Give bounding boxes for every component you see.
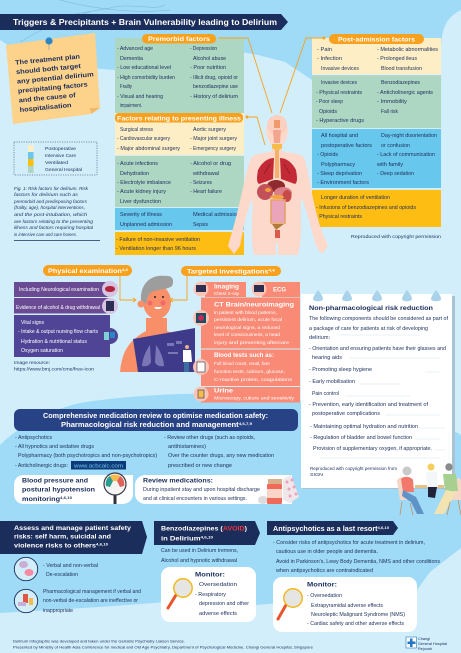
panel: investigations — [193, 282, 300, 402]
footer credits: Presented by Ministry of Health Asia Conference for medical and Old Age Psychiatry, Department of Psychological Medicine, Changi General Hospital, Singapore — [13, 646, 313, 650]
panel: monitor benzodiazepines: adverse effects — [199, 611, 237, 617]
panel: non-pharmacological risk reduction: Pain control — [312, 391, 339, 397]
panel: non-pharmacological risk reduction: Non-pharmacological risk reduction — [309, 305, 433, 312]
heading: factors relating to presenting illness — [115, 113, 243, 122]
panel: post-admission factors: Polypharmacy — [321, 162, 355, 168]
text: benzodiazepine use: Alcohol and hypnotic withdrawal — [161, 558, 237, 564]
sticky note callout: The treatment plan — [15, 54, 80, 67]
panel: predisposing and presenting factors: - History of delirium — [190, 94, 239, 100]
panel: investigations: injury and preventing aftercare — [214, 340, 289, 346]
callout: blood pressure monitoring: Blood pressure and — [22, 478, 88, 484]
figure caption: factors for delirium such as — [14, 192, 79, 197]
panel: predisposing and presenting factors: - Major joint surgery — [190, 136, 237, 142]
connector lines — [218, 37, 325, 145]
panel: physical examination items: Oxygen saturation — [21, 348, 63, 354]
heading: antipsychotics — [267, 521, 398, 535]
medication review list: Polypharmacy (both psychotropics and non-psychotropics) — [18, 453, 157, 459]
heading: physical examination — [43, 265, 132, 276]
panel: monitor antipsychotics: Neuroleptic Malignant Syndrome (NMS) — [311, 612, 405, 618]
panel: predisposing and presenting factors: Surgical stress — [120, 127, 153, 133]
panel: predisposing and presenting factors: - Alcohol or drug — [190, 161, 231, 167]
panel: non-pharmacological risk reduction: - Prevention, early identification and treatment of — [309, 402, 429, 408]
heading: benzodiazepines: in Delirium — [161, 536, 196, 542]
figure caption — [13, 186, 94, 237]
panel: investigations: C-reactive protein, coagulations — [214, 377, 293, 383]
heading: premorbid factors — [142, 34, 216, 44]
panel: non-pharmacological risk reduction: - Maintaining optimal hydration and nutrition — [310, 424, 418, 430]
panel: investigations: Imaging — [214, 284, 239, 290]
panel: physical examination items: Hydration & nutritional status — [21, 339, 87, 345]
sticky note callout: precipitating factors — [18, 81, 88, 95]
panel: post-admission factors: - Physical restraints — [316, 214, 362, 220]
callout: review medications: During inpatient stay and upon hospital discharge — [143, 487, 260, 493]
heading: benzodiazepines — [154, 521, 260, 545]
text: pharmacological management: inappropriate — [43, 608, 73, 614]
callout: review medications — [135, 475, 292, 504]
panel: investigations: level of consciousness, a head — [214, 332, 280, 338]
heading: medication review: Comprehensive medication review to optimise medication safety: — [43, 413, 268, 420]
panel: non-pharmacological risk reduction: - Promoting sleep hygiene — [309, 367, 372, 373]
panel: predisposing and presenting factors: Severity of illness — [120, 212, 162, 218]
panel: physical examination items: Including Neurological examination — [19, 287, 99, 293]
logo: hospital: Changi — [418, 637, 430, 641]
image source note: Image resource: — [14, 360, 50, 365]
heading: assess and manage safety: 4,6,10 — [96, 542, 109, 546]
sticky note callout: any potential delirium — [17, 71, 94, 86]
panel: post-admission factors: - Sleep deprivation — [317, 171, 362, 177]
panel: physical examination items: Vital signs — [21, 320, 44, 326]
text: pharmacological management — [43, 589, 141, 614]
text: de-escalation: - Verbal and non-verbal — [43, 563, 98, 569]
panel: predisposing and presenting factors: Sepsis — [193, 222, 208, 228]
legend: Intensive Care — [45, 153, 77, 158]
footer credits: Delirium Infographic was developed and taken under the Geriatric Psychiatry Liaison Service. — [13, 640, 185, 644]
text: de-escalation — [43, 563, 98, 578]
panel: predisposing and presenting factors: - Acute infections — [117, 161, 158, 167]
callout: blood pressure monitoring: postural hypotension — [22, 486, 95, 494]
text: antipsychotic cautions: - Consider risks of antipsychotics for acute treatment in delirium, — [273, 540, 425, 546]
footer credits — [13, 640, 313, 650]
heading: medication review: Pharmacological risk reduction and management — [61, 422, 225, 429]
panel: predisposing and presenting factors: withdrawal — [192, 171, 219, 177]
panel: monitor antipsychotics: Monitor: — [307, 582, 337, 588]
panel: monitor benzodiazepines: Monitor: — [195, 572, 225, 578]
heading: benzodiazepines: 4,6,10 — [200, 534, 214, 540]
heading: assess and manage safety — [0, 521, 147, 554]
panel: investigations: Blood tests such as: — [214, 352, 274, 359]
panel: post-admission factors: with family — [376, 162, 403, 168]
heading: antipsychotics: Antipsychotics as a last resort — [273, 526, 375, 533]
panel: non-pharmacological risk reduction: SIGN — [310, 472, 323, 477]
text: de-escalation: De-escalation — [46, 572, 78, 578]
figure caption: illness and factors requiring hospital — [14, 225, 94, 230]
heading: medication review: 4,6,7,9 — [239, 421, 253, 426]
figure caption: (frailty, age), hospital interventions, — [14, 205, 85, 210]
panel: predisposing and presenting factors: - Visual and hearing — [117, 94, 163, 100]
panel: non-pharmacological risk reduction: - Early mobilisation — [309, 379, 355, 385]
panel: predisposing and presenting factors: - Heart failure — [190, 189, 222, 195]
medication review list: - Review other drugs (such as opioids, — [164, 435, 255, 441]
heading: benzodiazepines: Benzodiazepines ( AVOID) — [161, 526, 247, 532]
panel: post-admission factors: Longer duration of ventilation — [321, 195, 390, 201]
text: antipsychotic cautions: cautious use in older people and dementia. — [276, 549, 378, 555]
panel: predisposing and presenting factors: - Failure of non-invasive ventilation — [116, 237, 200, 243]
panel: investigations: function tests, calcium, glucose, — [214, 369, 285, 375]
sticky note callout: hospitalisation — [19, 102, 72, 114]
panel: non-pharmacological risk reduction: The following components should be considered as part of — [309, 316, 449, 322]
panel: predisposing and presenting factors: - Low educational level — [117, 65, 171, 71]
text: antipsychotic cautions — [273, 540, 440, 574]
panel: post-admission factors: - Anticholinergic agents — [377, 90, 433, 96]
panel: non-pharmacological risk reduction: - Orientation and ensuring patients have their glasses and — [309, 346, 446, 352]
panel: non-pharmacological risk reduction: delirium: — [309, 335, 330, 341]
panel: physical examination items — [14, 281, 118, 357]
panel: monitor antipsychotics: - Oversedation — [307, 593, 342, 599]
sticky note callout: should both target — [16, 63, 82, 76]
illustration: patients with clinician — [397, 463, 461, 515]
icon: conversation — [14, 557, 38, 581]
panel: non-pharmacological risk reduction: - Regulation of bladder and bowel function — [310, 435, 412, 441]
panel: post-admission factors: - Lack of communication — [377, 152, 435, 158]
heading: post-admission factors: Post-admission factors — [338, 36, 415, 44]
panel: post-admission factors: Fall risk — [381, 109, 398, 115]
text: benzodiazepine use: Can be used in Delirium tremens, — [161, 548, 238, 554]
panel: post-admission factors: - Deep sedation — [377, 171, 414, 177]
panel: post-admission factors: - Physical restraints — [316, 90, 362, 96]
logo: hospital: Rejuvah — [418, 647, 432, 651]
panel: monitor benzodiazepines: Oversedation — [199, 582, 237, 588]
panel: non-pharmacological risk reduction — [301, 290, 455, 489]
arrows to patient — [120, 276, 187, 302]
heading: targeted investigations — [181, 266, 281, 276]
panel: predisposing and presenting factors: Alcohol abuse — [193, 56, 226, 62]
panel: monitor antipsychotics: - Cardiac safety and other adverse effects — [307, 621, 404, 627]
panel: post-admission factors: - Hyperactive drugs — [316, 118, 364, 124]
figure caption: and the post-intubation, which — [14, 212, 88, 217]
panel: monitor benzodiazepines — [161, 567, 256, 622]
sticky note callout — [6, 33, 100, 124]
figure caption: in intensive care and care homes. — [14, 232, 77, 237]
medication review list: Over the counter drugs, any new medication — [168, 453, 274, 459]
heading: post-admission factors — [329, 34, 424, 44]
panel: monitor benzodiazepines: - Respiratory — [195, 592, 226, 598]
panel: post-admission factors: Invasive devices — [321, 66, 359, 72]
panel: predisposing and presenting factors — [115, 38, 244, 255]
panel: investigations: Urine — [214, 388, 234, 394]
logo: hospital: General Hospital — [418, 642, 447, 646]
medication review list: - All hypnotics and sedative drugs — [15, 444, 94, 450]
legend — [14, 142, 97, 175]
arrow line — [14, 240, 100, 242]
panel: predisposing and presenting factors: - Poor nutrition — [190, 65, 226, 71]
medication review list — [15, 435, 274, 469]
heading: medication review — [14, 409, 298, 431]
text: antipsychotic cautions: Avoid in Parkinson's, Lewy Body Dementia, NMS and other conditions — [276, 559, 440, 565]
illustration: human body with organs — [228, 115, 328, 255]
panel: predisposing and presenting factors: - Electrolyte imbalance — [117, 180, 171, 186]
figure caption: are factors relating to the presenting — [14, 219, 94, 224]
panel: investigations: neurological signs, a reduced — [214, 325, 280, 331]
panel: predisposing and presenting factors: - Cardiovascular surgery — [117, 136, 170, 142]
panel: predisposing and presenting factors: Frailty — [120, 84, 132, 90]
illustration: patient with chest x-ray — [120, 276, 195, 372]
panel: predisposing and presenting factors: Dementia — [120, 56, 143, 62]
panel: investigations: ECG — [273, 286, 286, 294]
panel: predisposing and presenting factors: - Seizures — [190, 180, 212, 186]
callout: blood pressure monitoring: monitoring — [22, 496, 58, 503]
legend: Postoperative — [45, 146, 77, 151]
panel: non-pharmacological risk reduction: a package of care for patients at risk of developing — [309, 326, 428, 332]
panel: predisposing and presenting factors: - Major abdominal surgery — [117, 146, 180, 152]
panel: post-admission factors: Blood transfusion — [381, 66, 422, 72]
heading: factors relating to presenting illness: Factors relating to presenting illness — [117, 115, 241, 122]
panel: investigations: Microscopy, culture and sensitivity — [214, 396, 295, 402]
medication review list: - Antipsychotics — [15, 435, 52, 441]
panel: non-pharmacological risk reduction: hearing aids — [312, 355, 342, 361]
panel: post-admission factors: - Prolonged ileus — [377, 56, 417, 62]
panel: physical examination items: Evidence of alcohol & drug withdrawal — [16, 305, 100, 311]
panel: predisposing and presenting factors: - Advanced age — [117, 46, 153, 52]
panel: post-admission factors: - Infusions of benzodiazepines and opioids — [316, 205, 416, 211]
legend: General Hospital — [45, 167, 82, 172]
panel: post-admission factors: postoperative factors — [321, 143, 372, 149]
heading: assess and manage safety: Assess and manage patient safety — [14, 525, 131, 532]
medication review list: - Anticholinergic drugs: — [15, 463, 68, 469]
panel: predisposing and presenting factors: benzodiazepine use — [193, 84, 238, 90]
panel: non-pharmacological risk reduction: Reproduced with copyright permission from — [310, 466, 397, 471]
panel: predisposing and presenting factors: - Acute kidney injury — [117, 189, 166, 195]
panel: physical examination items: - Intake & output nursing flow charts — [18, 329, 98, 335]
panel: investigations: CT Brain/neuroimaging — [214, 302, 294, 308]
callout: blood pressure monitoring — [14, 473, 133, 504]
text: pharmacological management: Pharmacological management if verbal and — [43, 589, 141, 595]
panel: predisposing and presenting factors: impairment. — [120, 103, 142, 109]
panel: post-admission factors: - Opioids — [317, 152, 338, 158]
heading: assess and manage safety: violence risks to others — [14, 542, 90, 550]
panel: investigations: persistent delirium, acute focal — [214, 317, 282, 323]
panel: non-pharmacological risk reduction: Provision of supplementary oxygen, if appropriate. — [313, 446, 432, 452]
link: anticholinergic calculator: www.acbcalc.com — [74, 463, 123, 469]
icon: medicines — [258, 475, 299, 504]
panel: post-admission factors: Benzodiazepines — [381, 80, 420, 86]
panel: monitor benzodiazepines: depression and other — [199, 601, 249, 607]
panel: investigations: Full blood count, renal, liver — [214, 361, 270, 367]
legend: Ventilated — [45, 160, 69, 165]
panel: monitor antipsychotics — [273, 577, 417, 632]
panel: investigations: Chest X-ray — [214, 291, 240, 296]
panel: post-admission factors: - Environment factors — [317, 180, 369, 186]
panel: predisposing and presenting factors: - Depression — [190, 46, 217, 52]
link: anticholinergic calculator — [71, 461, 126, 470]
panel: investigations: in patient with blood patterns, — [214, 310, 277, 316]
logo: hospital — [406, 637, 447, 651]
callout: blood pressure monitoring: 4,6,10 — [60, 495, 73, 500]
callout: review medications: Review medications: — [143, 478, 213, 484]
figure caption: premorbid and predisposing factors — [13, 199, 88, 204]
panel: post-admission factors: All hospital and — [321, 133, 358, 139]
heading: targeted investigations: 4,6 — [268, 268, 276, 272]
panel: monitor antipsychotics: Extrapyramidal adverse effects — [311, 603, 383, 609]
panel: predisposing and presenting factors: Aortic surgery — [193, 127, 226, 133]
panel: predisposing and presenting factors: Unplanned admission — [120, 222, 172, 228]
panel: post-admission factors — [312, 38, 441, 227]
panel: non-pharmacological risk reduction: postoperative complications — [312, 411, 380, 417]
medication review list: antihistamines) — [168, 444, 206, 450]
heading: assess and manage safety: risks: self harm, suicidal and — [14, 534, 111, 540]
image source note — [14, 360, 95, 372]
panel: predisposing and presenting factors: - High comorbidity burden — [117, 75, 175, 81]
panel: predisposing and presenting factors: - Emergency surgery — [190, 146, 236, 152]
copyright note: Reproduced with copyright permission — [351, 234, 442, 239]
heading: physical examination: 4,6 — [122, 267, 129, 272]
panel: post-admission factors: Invasive devices — [321, 80, 357, 86]
panel: predisposing and presenting factors: Liver dysfunction — [120, 199, 161, 205]
panel: predisposing and presenting factors: Medical admission — [193, 212, 240, 218]
title banner — [0, 14, 288, 30]
text: pharmacological management: non-verbal de-escalation are ineffective or — [43, 598, 138, 604]
title banner: Triggers & Precipitants + Brain Vulnerability leading to Delirium — [13, 18, 277, 27]
panel: post-admission factors: - Poor sleep — [316, 99, 343, 105]
medication review list: prescribed or new change — [168, 463, 232, 469]
panel: post-admission factors: Day-night disorientation — [381, 133, 437, 139]
panel: post-admission factors: Opioids — [319, 109, 337, 115]
panel: post-admission factors: - Infection — [317, 56, 342, 62]
panel: post-admission factors: - Pain — [317, 47, 332, 53]
heading: antipsychotics: 4,6,10 — [378, 525, 390, 530]
heading: premorbid factors: Premorbid factors — [148, 36, 210, 43]
icon: medication — [14, 589, 38, 613]
text: antipsychotic cautions: when antipsychotics are contraindicated — [275, 568, 373, 574]
panel: post-admission factors: or confusion — [381, 143, 410, 149]
callout: review medications: and at clinical encounters in various settings. — [143, 496, 247, 502]
panel: predisposing and presenting factors: - Illicit drug, opioid or — [190, 75, 238, 81]
image source note: https://www.bmj.com/cme/free-icon — [14, 366, 95, 372]
text: benzodiazepine use — [161, 548, 238, 564]
panel: predisposing and presenting factors: - Ventilation longer than 96 hours — [116, 246, 196, 252]
panel: post-admission factors: - Metabolic abnormalities — [377, 47, 438, 53]
panel: predisposing and presenting factors: Dehydration — [120, 171, 149, 177]
heading: physical examination: Physical examination — [48, 268, 115, 275]
panel: post-admission factors: - Immobility — [377, 99, 407, 105]
figure caption: Fig. 1: Risk factors for delirium. Risk — [14, 186, 89, 191]
sticky note callout: and the cause of — [19, 92, 77, 105]
heading: targeted investigations: Targeted investigations — [187, 268, 256, 276]
